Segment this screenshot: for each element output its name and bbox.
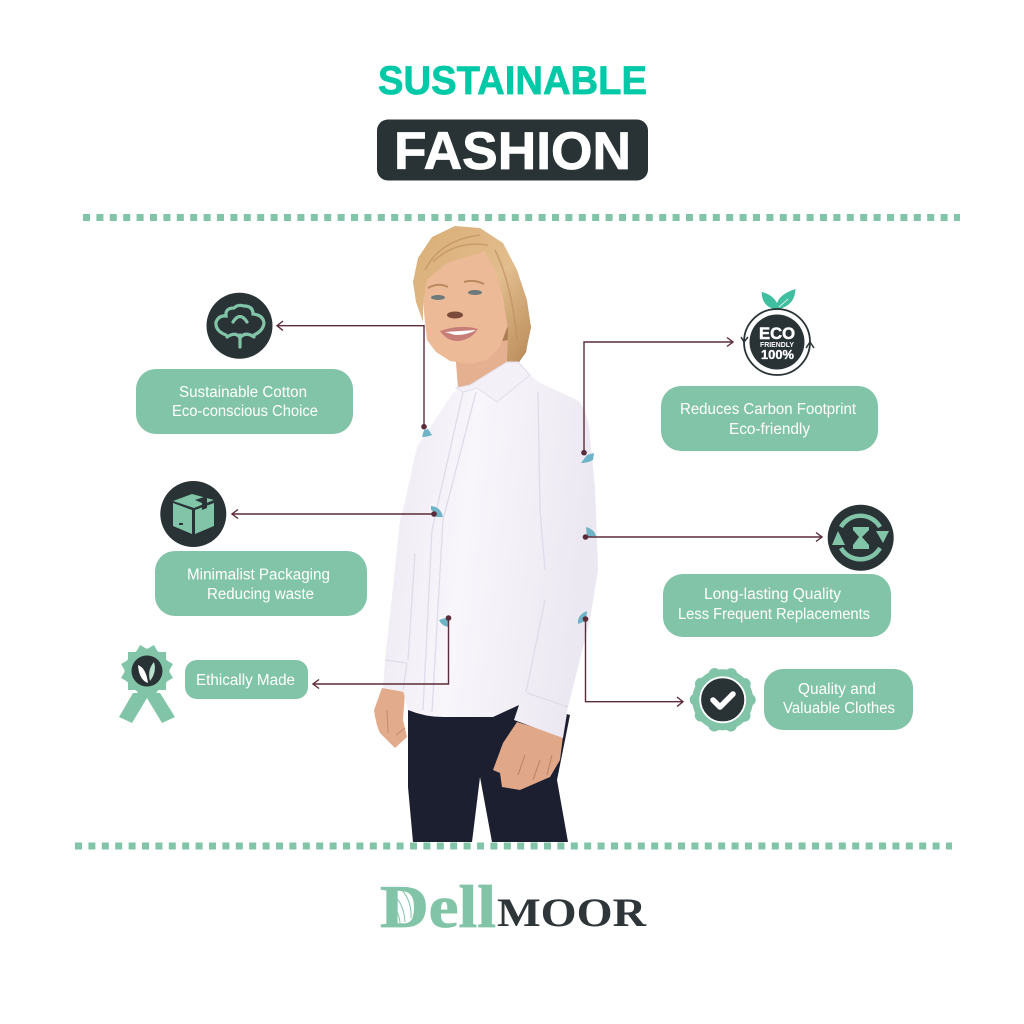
callout: long-lasting quality [583,505,894,637]
collar [456,362,530,402]
connector: packaging [232,506,443,518]
eyes, nose and smile [428,281,484,341]
hair streaks [425,235,517,340]
logo: dellmoor: MOOR [497,890,647,935]
pill: long-lasting quality [663,574,891,637]
pill: carbon footprint [661,386,878,451]
icon: eco friendly badge: FRIENDLY [760,342,794,349]
callout: ethically made [119,615,451,723]
callout: sustainable cotton [136,293,432,437]
pill: carbon footprint: Eco-friendly [729,421,810,438]
pill: valuable clothes: Quality and [798,681,876,698]
shirt [383,363,598,738]
right hand [493,722,563,790]
face [423,248,508,364]
connector: carbon footprint [581,338,733,463]
pill: long-lasting quality: Long-lasting Quality [704,586,841,603]
shirt details [385,392,568,712]
callout: carbon footprint [581,289,878,463]
pill: long-lasting quality: Less Frequent Replacements [678,606,870,623]
logo: dellmoor: Dell [380,874,496,940]
pill: ethically made [185,660,308,699]
icon: eco friendly badge [741,289,814,375]
icon: hourglass with arrows [828,505,894,571]
connector: long-lasting quality [583,527,822,542]
icon: check badge [692,669,753,730]
icon: cotton plant [206,293,272,359]
callout: valuable clothes [578,611,913,730]
icon: box [160,481,226,547]
left hand [374,688,407,748]
logo: dellmoor [380,874,647,940]
connector: valuable clothes [578,611,683,706]
icon: eco friendly badge: ECO [759,325,795,343]
pill: minimalist packaging [155,551,367,616]
icon: eco friendly badge: 100% [761,348,794,362]
pill: carbon footprint: Reduces Carbon Footprint [680,401,857,418]
pill: sustainable cotton [136,369,353,434]
connector: ethically made [313,615,451,688]
pill: minimalist packaging: Minimalist Packaging [187,566,330,584]
title: fashion pill: FASHION [394,122,631,181]
neck [455,340,508,397]
pill: minimalist packaging: Reducing waste [207,586,314,603]
hair front [413,226,531,364]
trousers [408,700,570,842]
pill: sustainable cotton: Sustainable Cotton [179,384,307,401]
pill: valuable clothes: Valuable Clothes [783,700,895,717]
pill: sustainable cotton: Eco-conscious Choice [172,403,318,420]
pill: valuable clothes [764,669,913,730]
connector: cotton [277,321,432,437]
hair back [495,300,531,366]
icon: rosette with leaf [119,645,175,723]
pill: ethically made: Ethically Made [196,672,295,689]
boy wearing white shirt [374,226,598,842]
callout: minimalist packaging [155,481,443,616]
title: sustainable: SUSTAINABLE [378,59,647,103]
